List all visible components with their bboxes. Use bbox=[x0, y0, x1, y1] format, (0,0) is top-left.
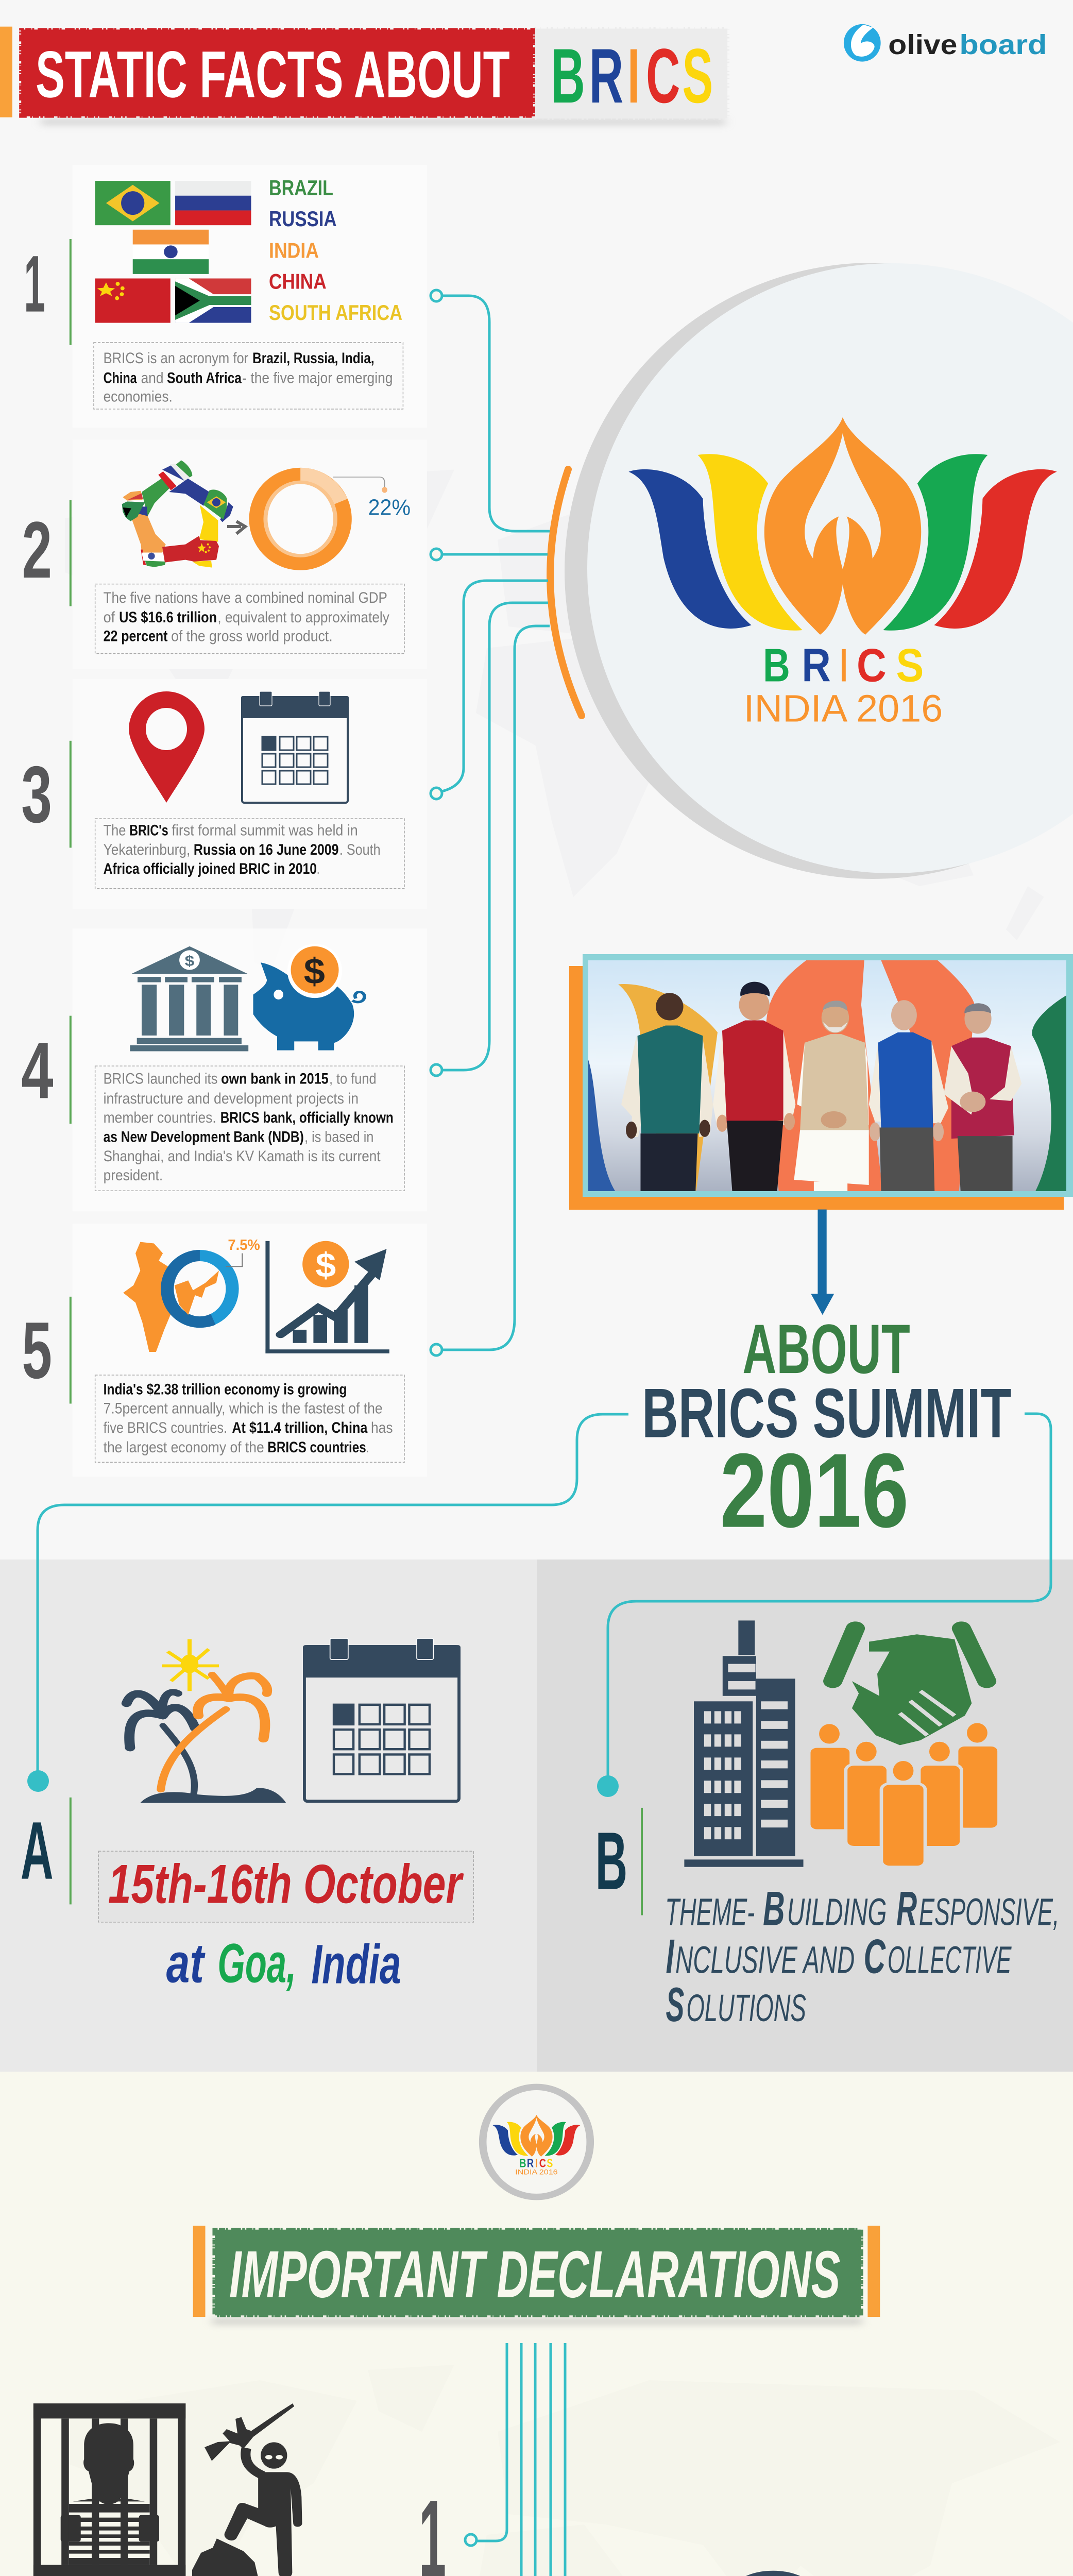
number 5: 5 bbox=[22, 1305, 52, 1395]
seal: BRICS logo: INDIA 2016 bbox=[515, 2168, 558, 2176]
icon: business people bbox=[809, 1723, 999, 1867]
icon: logo mark bbox=[844, 24, 881, 62]
icon: map pin bbox=[129, 691, 205, 803]
panel 3 text box: first formal summit was held in bbox=[172, 822, 358, 839]
icon: building bbox=[684, 1620, 804, 1867]
number 2 bbox=[22, 500, 72, 606]
logo wordmark: board bbox=[959, 29, 1047, 60]
number 2: 2 bbox=[22, 505, 52, 595]
number 5 bbox=[22, 1297, 72, 1403]
flag: South Africa bbox=[175, 278, 251, 323]
logo wordmark: olive bbox=[888, 29, 957, 60]
letter A: A bbox=[21, 1805, 54, 1896]
panel 4: bank bbox=[73, 928, 427, 1211]
panel 1: what BRICS is bbox=[73, 165, 427, 428]
title word BRICS: R bbox=[589, 32, 623, 119]
header banner: static facts about BRICS bbox=[0, 27, 727, 125]
theme text: OLUTIONS bbox=[686, 1987, 806, 2030]
seal: BRICS logo: R bbox=[527, 2157, 534, 2170]
letter A bbox=[21, 1798, 72, 1904]
text box bbox=[94, 343, 403, 409]
text box: five BRICS countries. bbox=[104, 1419, 227, 1436]
connector to section A bbox=[38, 1414, 628, 1772]
seal: BRICS logo: I bbox=[535, 2157, 538, 2170]
big circle with BRICS logo bbox=[565, 263, 1073, 879]
text box: and bbox=[141, 369, 163, 386]
text box: BRICS is an acronym for bbox=[104, 350, 248, 367]
date and location: India bbox=[311, 1933, 401, 1995]
date and location: at bbox=[166, 1932, 206, 1994]
logo text BRICS: R bbox=[802, 640, 831, 692]
title word BRICS: C bbox=[646, 32, 680, 119]
panel 3 text box bbox=[95, 819, 404, 889]
flag: Brazil bbox=[95, 181, 171, 225]
connector lines declarations bbox=[465, 2343, 609, 2576]
text box: president. bbox=[104, 1167, 163, 1184]
number 1 bbox=[24, 239, 72, 345]
panel 3 text box: BRIC's bbox=[129, 822, 168, 839]
background: world map top bbox=[65, 470, 1060, 973]
text box: BRICS countries bbox=[267, 1439, 366, 1456]
logo text BRICS bbox=[763, 640, 924, 692]
flag: Russia bbox=[175, 181, 251, 225]
theme text: NCLUSIVE AND bbox=[675, 1938, 855, 1981]
text box: 22 percent bbox=[104, 628, 167, 645]
banner: important declarations bbox=[193, 2226, 880, 2324]
icon: India map with donut: 7.5% bbox=[228, 1237, 260, 1253]
panel 3 text box: . bbox=[317, 860, 319, 877]
panel 3 text box: Africa officially joined BRIC in 2010 bbox=[104, 860, 317, 877]
title word BRICS: B bbox=[551, 32, 585, 119]
dot A bbox=[27, 1770, 49, 1792]
background: top section bbox=[0, 0, 1073, 1560]
theme text: THEME- bbox=[665, 1891, 755, 1934]
theme text: R bbox=[896, 1882, 917, 1936]
date and location: Goa, bbox=[217, 1932, 296, 1994]
title word BRICS: I bbox=[627, 32, 640, 119]
text box: of bbox=[104, 609, 115, 626]
theme text: S bbox=[666, 1978, 684, 2032]
connector lines panels to logo bbox=[431, 290, 550, 1355]
seal: BRICS logo: C bbox=[539, 2157, 546, 2170]
icon: five linked hands bbox=[122, 460, 233, 568]
icon: India map with donut bbox=[123, 1237, 260, 1352]
text box: , to fund bbox=[329, 1070, 377, 1087]
text box: 7.5percent annually, which is the fastest of the bbox=[104, 1400, 383, 1417]
panel 2: GDP bbox=[73, 439, 427, 669]
icon: prisoner behind bars bbox=[33, 2403, 185, 2576]
arrow bbox=[227, 521, 245, 534]
text box bbox=[95, 1375, 404, 1462]
theme text: B bbox=[763, 1882, 785, 1936]
arrow: photo to heading bbox=[811, 1210, 834, 1315]
number 1: 1 bbox=[24, 239, 45, 329]
icon: bank building bbox=[130, 946, 248, 1051]
logo text BRICS: S bbox=[896, 640, 924, 692]
text box: own bank in 2015 bbox=[221, 1070, 329, 1087]
header banner: static facts about BRICS: STATIC FACTS ABOUT bbox=[36, 38, 510, 111]
icon: handshake bbox=[833, 1629, 987, 1745]
heading: about BRICS summit 2016 bbox=[642, 1310, 1011, 1549]
BRICS lotus logo bbox=[628, 417, 1057, 635]
text box: The five nations have a combined nominal GDP bbox=[104, 589, 387, 606]
date and location: 15th-16th October bbox=[108, 1854, 464, 1915]
text box: as New Development Bank (NDB) bbox=[104, 1128, 304, 1145]
country names: RUSSIA bbox=[269, 207, 337, 231]
text box: has bbox=[371, 1419, 393, 1436]
icon: piggy bank: $ bbox=[304, 951, 325, 992]
text box: BRICS launched its bbox=[104, 1070, 217, 1087]
country names: CHINA bbox=[269, 269, 327, 294]
country names: BRAZIL bbox=[269, 176, 333, 200]
text box: BRICS bank, officially known bbox=[220, 1109, 394, 1126]
text box: Brazil, Russia, India, bbox=[252, 350, 374, 367]
background: declarations section bbox=[0, 2072, 1073, 2576]
panel 3 text box: Yekaterinburg, bbox=[104, 841, 190, 858]
text box bbox=[95, 584, 404, 653]
country names: INDIA bbox=[269, 238, 319, 262]
theme text: UILDING bbox=[787, 1891, 887, 1934]
text box: Shanghai, and India's KV Kamath is its current bbox=[104, 1147, 381, 1164]
text box: India's $2.38 trillion economy is growing bbox=[104, 1381, 347, 1398]
icon: palm trees and sun bbox=[127, 1639, 286, 1803]
seal: BRICS logo: B bbox=[519, 2157, 526, 2170]
oliveboard logo bbox=[844, 24, 1047, 62]
panel 3 text box: The bbox=[104, 822, 126, 839]
flag: India bbox=[133, 230, 209, 274]
section A content bbox=[127, 1639, 286, 1803]
country names: SOUTH AFRICA bbox=[269, 300, 402, 325]
text box: member countries. bbox=[104, 1109, 216, 1126]
icon: growth chart with coin bbox=[265, 1241, 389, 1353]
panel 3 text box: Russia on 16 June 2009 bbox=[194, 841, 339, 858]
donut chart 22 percent bbox=[249, 468, 411, 570]
orange arc bbox=[550, 469, 582, 716]
connector to section B bbox=[608, 1414, 1051, 1777]
logo text BRICS: I bbox=[840, 640, 847, 692]
donut chart 22 percent: 22% bbox=[368, 495, 411, 520]
text box: . bbox=[366, 1439, 369, 1456]
icon: piggy bank bbox=[253, 944, 364, 1050]
logo text BRICS: C bbox=[857, 640, 887, 692]
logo text India 2016: INDIA 2016 bbox=[744, 687, 943, 730]
date and location bbox=[98, 1851, 473, 1995]
logo wordmark bbox=[888, 29, 1047, 60]
icon: bank building: $ bbox=[185, 953, 194, 970]
logo text BRICS: B bbox=[763, 640, 790, 692]
flag: China bbox=[95, 278, 171, 323]
heading: about BRICS summit 2016: 2016 bbox=[720, 1432, 909, 1549]
header banner: static facts about BRICS: S bbox=[682, 32, 713, 119]
letter B: B bbox=[595, 1815, 627, 1907]
photo: leaders at summit bbox=[569, 954, 1073, 1210]
text box: At $11.4 trillion, China bbox=[232, 1419, 368, 1436]
text box bbox=[95, 1066, 404, 1191]
theme text: C bbox=[863, 1929, 886, 1984]
text box: the largest economy of the bbox=[104, 1439, 264, 1456]
number 4: 4 bbox=[21, 1025, 54, 1115]
title word BRICS bbox=[551, 32, 713, 119]
icon: calendar bbox=[241, 691, 349, 803]
theme text: I bbox=[666, 1929, 675, 1984]
panel 5: Indian economy bbox=[73, 1224, 427, 1477]
text box: , equivalent to approximately bbox=[217, 609, 389, 626]
letter B bbox=[595, 1808, 643, 1915]
icon: calendar A bbox=[303, 1638, 461, 1801]
theme text bbox=[665, 1882, 1059, 2032]
panel 3 text box: . South bbox=[339, 841, 381, 858]
text box: US $16.6 trillion bbox=[119, 609, 217, 626]
number 4 bbox=[21, 1016, 72, 1124]
panel 3: first summit background bbox=[73, 679, 427, 909]
icon: growth chart with coin: $ bbox=[315, 1246, 336, 1284]
text box: infrastructure and development projects in bbox=[104, 1090, 359, 1107]
background: world map declarations bbox=[65, 2365, 1060, 2576]
icon: masked terrorist with rifle bbox=[192, 2403, 302, 2576]
text box: South Africa bbox=[167, 369, 242, 386]
dot B bbox=[597, 1775, 619, 1797]
text box: China bbox=[104, 369, 137, 386]
seal: BRICS logo: S bbox=[547, 2157, 553, 2170]
seal: BRICS logo bbox=[479, 2084, 594, 2200]
text box: economies. bbox=[104, 388, 173, 405]
section B content bbox=[684, 1620, 999, 1867]
number 3: 3 bbox=[21, 749, 52, 839]
background: section A bbox=[0, 1560, 537, 2072]
country names bbox=[269, 176, 402, 325]
text box: , is based in bbox=[304, 1128, 373, 1145]
icon: head with gear and bulb bbox=[714, 2571, 847, 2576]
text box: of the gross world product. bbox=[171, 628, 333, 645]
text box: - the five major emerging bbox=[242, 369, 393, 386]
background: section B bbox=[537, 1560, 1073, 2072]
